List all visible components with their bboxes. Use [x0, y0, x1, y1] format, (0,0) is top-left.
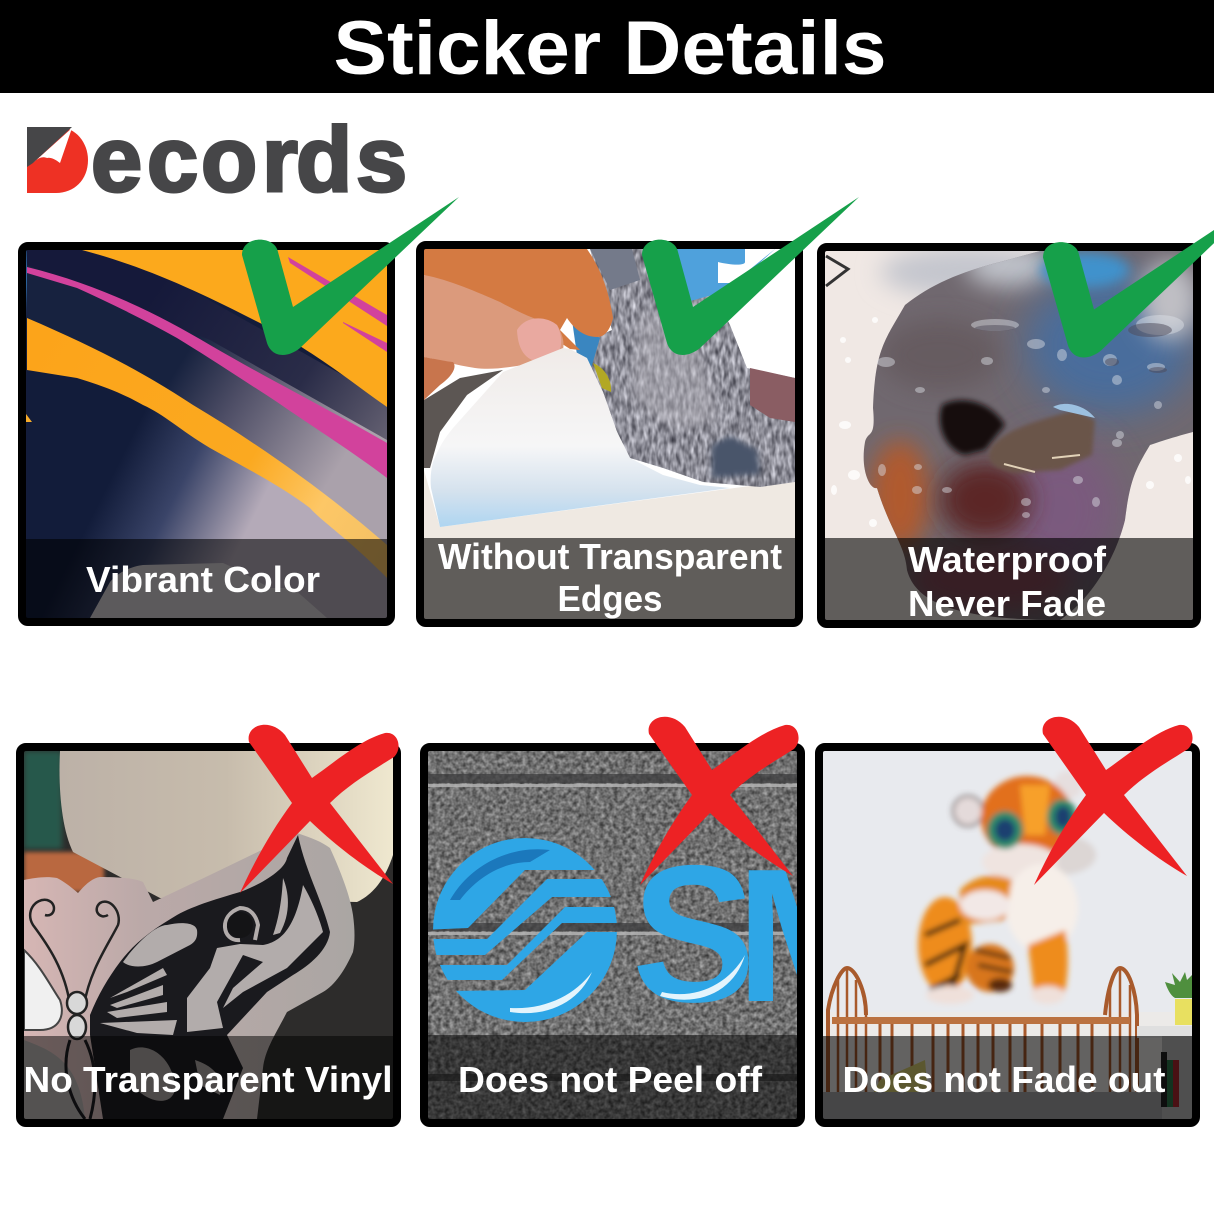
panel: vibrant color	[0, 197, 459, 622]
caption: Never Fade	[908, 583, 1106, 624]
panel: does not fade out	[819, 717, 1196, 1123]
area below orange stripe	[72, 413, 387, 618]
plant	[1165, 972, 1192, 1025]
icon: red cross	[1034, 717, 1193, 885]
blue letters SM: M	[736, 830, 894, 1042]
caption: No Transparent Vinyl	[24, 1059, 392, 1100]
caption bar	[428, 1035, 797, 1119]
cushion and sofa	[874, 1060, 928, 1092]
pink stripe	[27, 267, 387, 478]
icon: green check	[1043, 200, 1214, 357]
crib	[826, 966, 1139, 1092]
panel border	[424, 747, 801, 1123]
textured wall	[428, 751, 797, 1119]
panel border	[819, 747, 1196, 1123]
flower and body	[24, 950, 62, 1030]
caption: Vibrant Color	[86, 559, 320, 600]
caption bar	[823, 1036, 1192, 1119]
books	[1161, 1052, 1179, 1107]
orange stripe	[27, 318, 387, 578]
panel: waterproof never fade	[821, 200, 1214, 624]
panel border	[20, 747, 397, 1123]
snout	[989, 410, 1095, 473]
transparent film	[24, 833, 354, 1119]
icon: red cross	[240, 725, 399, 893]
stain	[864, 251, 1193, 620]
title banner	[0, 0, 1214, 93]
caption: Edges	[558, 578, 662, 619]
caption bar	[424, 538, 795, 619]
peeled paper	[431, 348, 730, 527]
blue letters SM	[637, 864, 797, 1003]
cat sticker	[570, 249, 795, 489]
caption	[438, 536, 782, 619]
panel border	[821, 247, 1197, 624]
orange top area	[82, 250, 387, 407]
icon: red cross	[640, 717, 799, 885]
caption bar	[26, 539, 387, 618]
caption: Does not Peel off	[458, 1059, 763, 1100]
title banner: Sticker Details	[334, 6, 886, 91]
band between pink and orange	[27, 265, 387, 560]
logo: Decords: ecords	[91, 109, 407, 211]
icon: green check	[242, 197, 459, 355]
dark frame corner	[826, 256, 848, 286]
icon: green check	[642, 197, 859, 355]
caption bar	[24, 1036, 393, 1119]
blue letters SM: S	[632, 826, 756, 1043]
caption bar	[825, 538, 1193, 620]
lower wing pattern	[130, 1047, 175, 1101]
caption: Does not Fade out	[842, 1059, 1166, 1100]
panel: without transparent edges	[420, 197, 859, 623]
panel: does not peel off	[420, 716, 805, 1127]
caption: Without Transparent	[438, 536, 782, 577]
water drops	[877, 315, 1184, 518]
panel border	[22, 246, 391, 622]
blue circular logo	[433, 838, 617, 1022]
caption: Waterproof	[908, 539, 1107, 580]
hand	[424, 249, 613, 468]
band above pink	[27, 250, 387, 445]
panel border	[420, 245, 799, 623]
blurred tiger	[918, 771, 1096, 1004]
caption	[908, 539, 1107, 624]
black wing	[90, 835, 330, 1119]
panel: no transparent vinyl	[20, 725, 399, 1123]
